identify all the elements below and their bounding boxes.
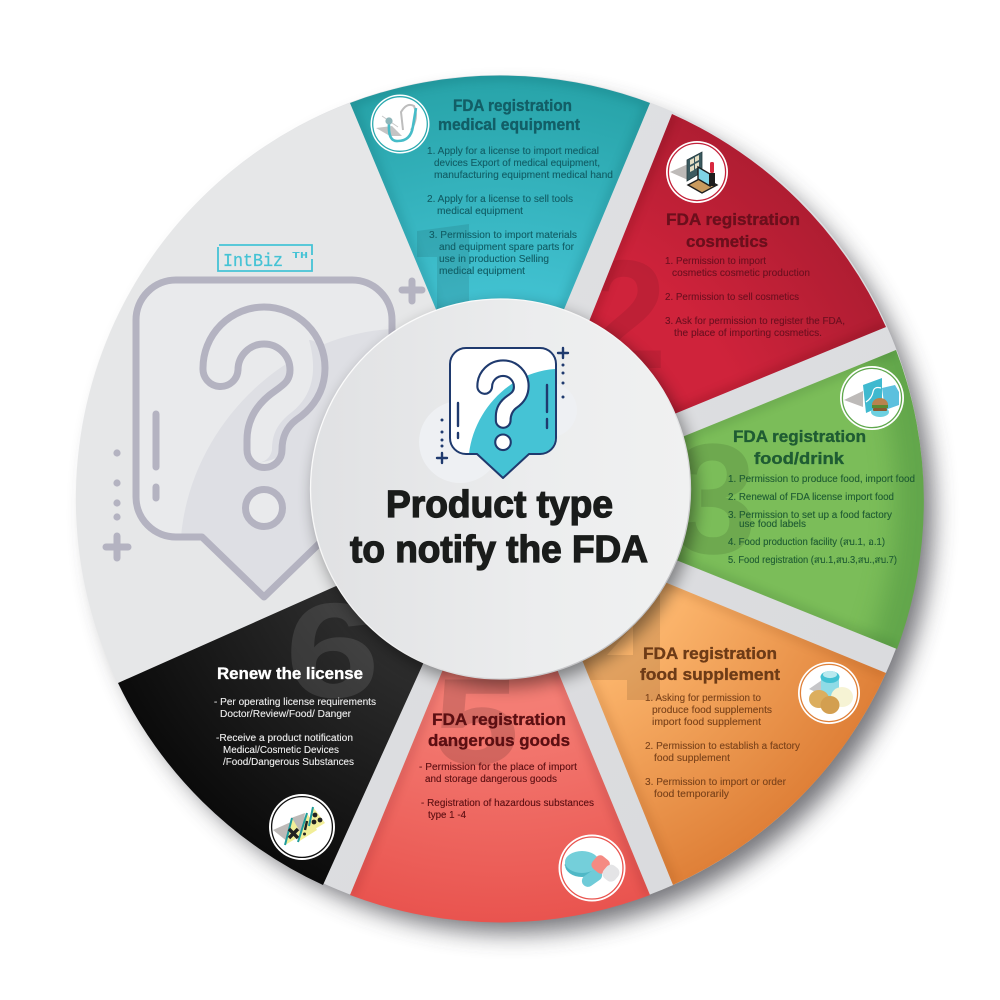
wheel base ring bbox=[76, 75, 924, 922]
icon: centre question bubble bbox=[419, 348, 577, 483]
heading: food supplement bbox=[640, 665, 780, 684]
text block: and storage dangerous goods bbox=[425, 774, 557, 785]
heading: FDA registration bbox=[453, 96, 572, 115]
text block: 5. Food registration (สบ.1,สบ.3,สบ.,สบ.7) bbox=[728, 555, 897, 566]
text block: 1. Asking for permission to bbox=[645, 693, 762, 704]
text block: the place of importing cosmetics. bbox=[674, 328, 822, 339]
text block: - Registration of hazardous substances bbox=[421, 798, 594, 809]
heading: medical equipment bbox=[438, 115, 580, 134]
number 4 bbox=[582, 594, 660, 700]
heading: FDA registration bbox=[643, 644, 777, 663]
number 5: 5 bbox=[435, 655, 518, 789]
heading bbox=[428, 710, 570, 750]
heading: FDA registration bbox=[432, 710, 566, 729]
icon: food and drink bbox=[840, 366, 904, 430]
text block: type 1 -4 bbox=[428, 810, 467, 821]
text block: cosmetics cosmetic production bbox=[672, 268, 810, 279]
heading: FDA registration bbox=[733, 427, 866, 446]
text block bbox=[645, 693, 800, 800]
heading: food/drink bbox=[754, 449, 845, 468]
heading bbox=[733, 427, 866, 468]
heading: Renew the license bbox=[217, 664, 363, 683]
heading bbox=[438, 96, 580, 134]
title: to notify the FDA bbox=[350, 529, 648, 571]
icon: stethoscope bbox=[370, 94, 430, 154]
logo: IntBiz: IntBiz bbox=[223, 252, 283, 272]
text block bbox=[728, 474, 915, 566]
text block: /Food/Dangerous Substances bbox=[223, 757, 354, 768]
panel: centre disc bbox=[310, 299, 690, 679]
text block: import food supplement bbox=[652, 717, 761, 728]
icon: hazard signs bbox=[269, 794, 335, 860]
text block bbox=[427, 146, 613, 277]
panel: medical equipment bbox=[350, 76, 650, 310]
text block: 2. Permission to sell cosmetics bbox=[665, 292, 799, 303]
panel: grey segment with large question icon bbox=[76, 230, 426, 656]
icon: pills bbox=[558, 834, 626, 902]
panel: cosmetics bbox=[590, 114, 886, 414]
text block: - Per operating license requirements bbox=[214, 697, 376, 708]
text block: produce food supplements bbox=[652, 705, 772, 716]
text block: devices Export of medical equipment, bbox=[434, 158, 600, 169]
number 2: 2 bbox=[581, 228, 667, 401]
heading: cosmetics bbox=[686, 232, 768, 251]
icon: large question bubble bbox=[106, 280, 422, 597]
text block: 2. Renewal of FDA license import food bbox=[728, 492, 894, 503]
text block: 3. Ask for permission to register the FDA, bbox=[665, 316, 845, 327]
text block: medical equipment bbox=[439, 266, 525, 277]
text block: Doctor/Review/Food/ Danger bbox=[220, 709, 352, 720]
number 3: 3 bbox=[670, 412, 757, 587]
text block: -Receive a product notification bbox=[216, 733, 353, 744]
text block bbox=[214, 697, 376, 768]
text block: - Permission for the place of import bbox=[419, 762, 577, 773]
icon: supplements bbox=[798, 662, 860, 724]
text block: 1. Permission to import bbox=[665, 256, 766, 267]
text block: 2. Permission to establish a factory bbox=[645, 741, 800, 752]
wheel drop shadow bbox=[93, 93, 933, 933]
panel: dangerous goods bbox=[350, 670, 650, 922]
text block: food temporarily bbox=[654, 789, 729, 800]
text block: use in production Selling bbox=[439, 254, 549, 265]
text block: 3. Permission to set up a food factory bbox=[728, 510, 892, 521]
text block: Medical/Cosmetic Devices bbox=[223, 745, 339, 756]
text block: 1. Permission to produce food, import food bbox=[728, 474, 915, 485]
number 6: 6 bbox=[285, 575, 380, 726]
text block: food supplement bbox=[654, 753, 730, 764]
text block: medical equipment bbox=[437, 206, 523, 217]
panel: renew the license bbox=[118, 586, 424, 885]
text block: 3. Permission to import or order bbox=[645, 777, 787, 788]
heading: dangerous goods bbox=[428, 731, 570, 750]
heading: FDA registration bbox=[666, 210, 800, 229]
title bbox=[350, 484, 648, 571]
text block: 1. Apply for a license to import medical bbox=[427, 146, 599, 157]
text block: 2. Apply for a license to sell tools bbox=[427, 194, 573, 205]
text block bbox=[419, 762, 594, 821]
text block: 3. Permission to import materials bbox=[429, 230, 577, 241]
text block: use food labels bbox=[739, 519, 806, 530]
text block: manufacturing equipment medical hand bbox=[434, 170, 613, 181]
text block bbox=[665, 256, 845, 339]
heading bbox=[640, 644, 780, 684]
panel: food and drink bbox=[677, 350, 924, 649]
heading bbox=[666, 210, 800, 251]
logo: IntBiz bbox=[218, 245, 312, 272]
panel: food supplement bbox=[582, 582, 886, 885]
title: Product type bbox=[386, 484, 613, 526]
number 1 bbox=[417, 224, 469, 309]
text block: and equipment spare parts for bbox=[439, 242, 575, 253]
text block: 4. Food production facility (สบ.1, อ.1) bbox=[728, 537, 885, 548]
icon: cosmetics bbox=[666, 141, 728, 203]
logo: IntBiz: TH bbox=[292, 251, 308, 261]
centre disc shadow bbox=[314, 305, 696, 687]
